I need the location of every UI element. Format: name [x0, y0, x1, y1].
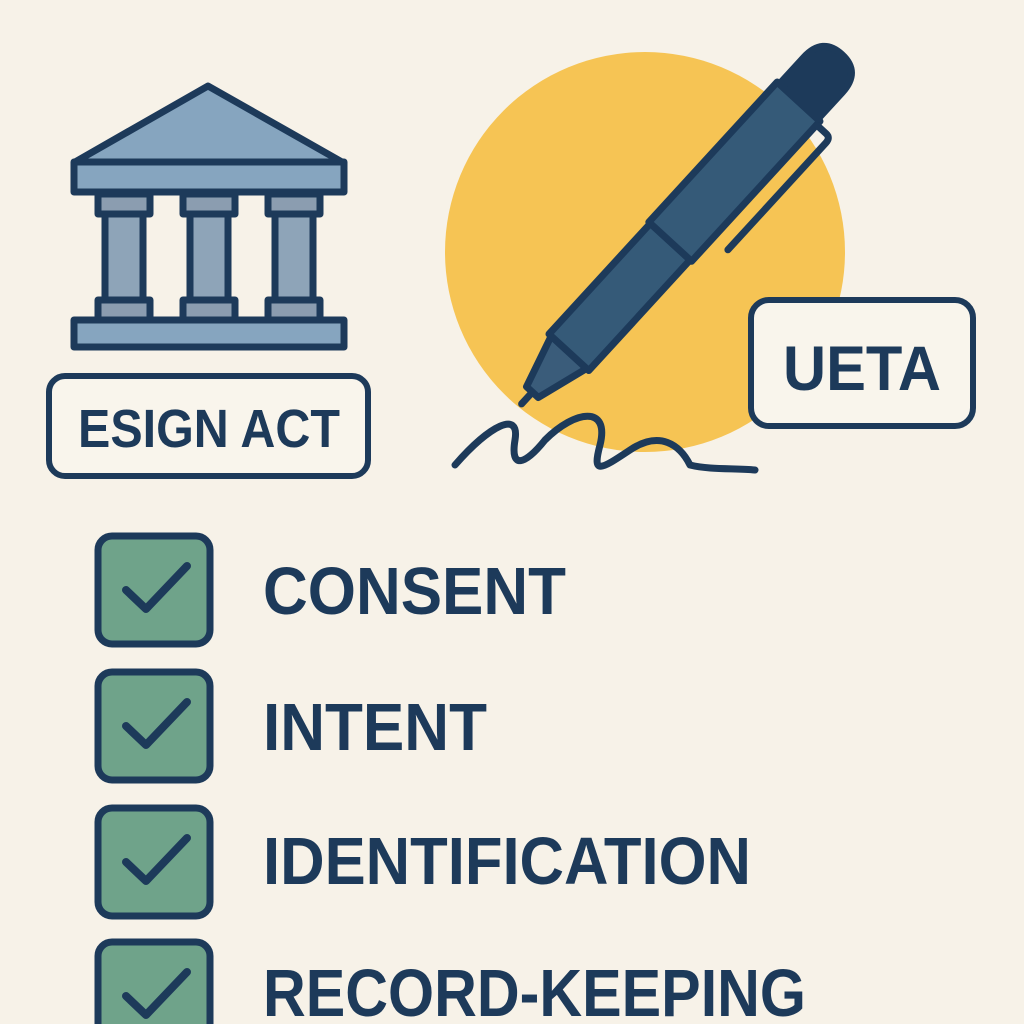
checklist item: identification: IDENTIFICATION — [263, 824, 751, 899]
label: ESIGN ACT: ESIGN ACT — [78, 399, 340, 459]
icon: government building — [74, 86, 344, 347]
signature squiggle — [455, 416, 755, 470]
label: UETA: UETA — [783, 334, 941, 404]
label: ESIGN ACT — [49, 376, 368, 476]
checklist item: consent — [98, 536, 566, 644]
checklist item: identification — [98, 808, 751, 916]
checklist item: record-keeping — [98, 942, 806, 1024]
icon: pen — [500, 35, 877, 436]
label: UETA — [751, 300, 973, 426]
yellow circle — [445, 52, 845, 452]
checklist item: consent: CONSENT — [263, 554, 566, 629]
checklist item: intent: INTENT — [263, 690, 487, 765]
checklist item: intent — [98, 672, 487, 780]
